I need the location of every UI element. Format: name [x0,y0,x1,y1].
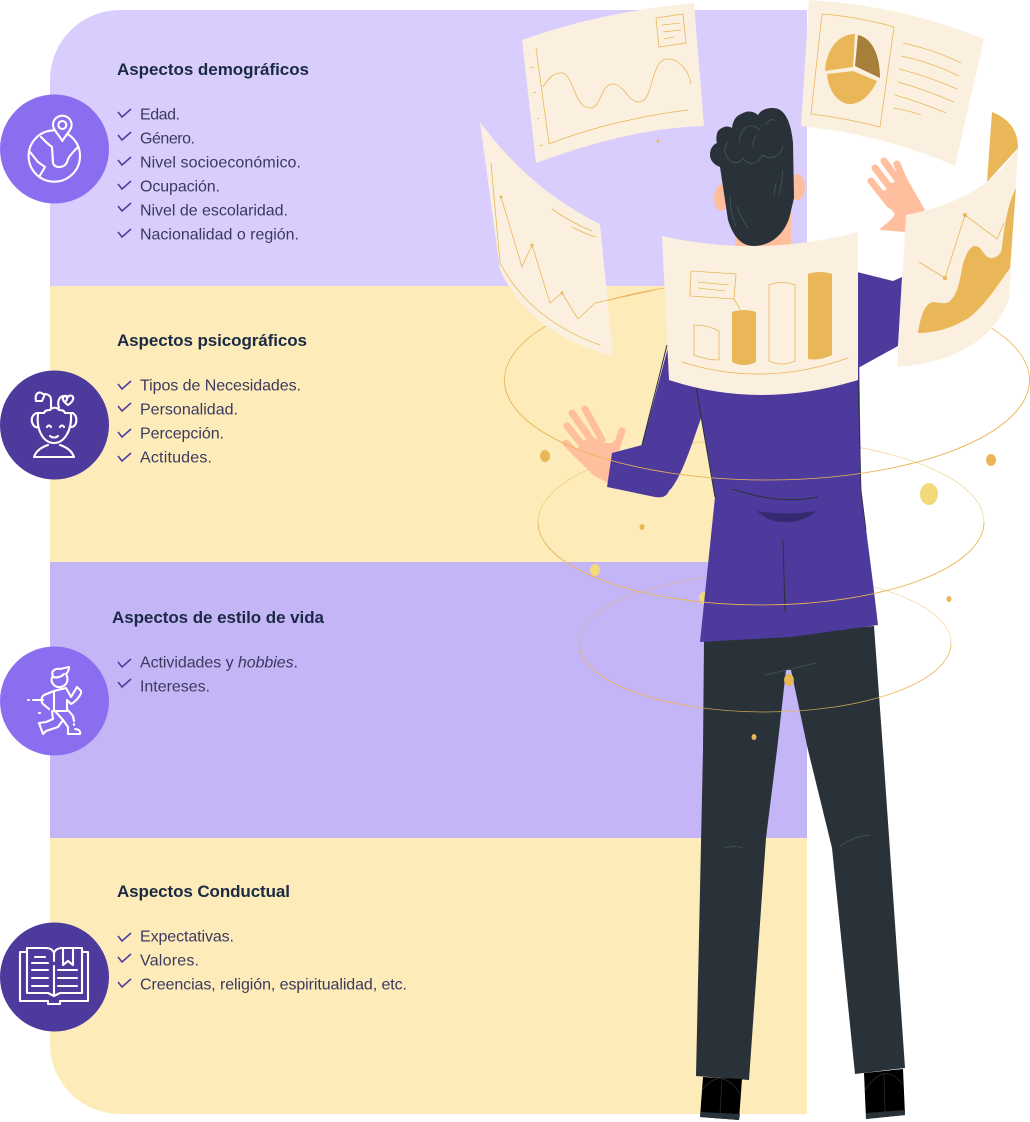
figure: right hand and raised arm [857,161,925,368]
section: aspectos psicográficos: Actitudes. [140,450,212,466]
chart card: top wave chart [522,3,704,163]
section: aspectos demográficos: Nivel socioeconómico. [140,154,301,172]
section: aspectos psicográficos [117,331,307,466]
decorative floating dots [540,140,996,740]
icon: running person [0,646,109,756]
chart card: left line chart [480,122,655,356]
orbit rings, front [504,380,1030,712]
section: aspectos demográficos: Edad. [140,106,180,124]
section: aspectos conductual: Valores. [140,952,199,970]
section: aspectos de estilo de vida: Aspectos de estilo de vida [112,608,325,627]
orbit rings, rear [504,280,1030,712]
section: aspectos de estilo de vida [112,608,325,696]
section: aspectos psicográficos: Personalidad. [140,402,238,418]
section: aspectos conductual: Expectativas. [140,928,234,946]
figure: trousers [696,626,905,1080]
figure: shoes [700,1069,905,1120]
section: aspectos demográficos: Género. [140,130,195,148]
icon: open book [0,922,109,1032]
chart card: center bar chart [662,232,858,395]
figure: jacket [607,270,878,642]
figure: hair [710,108,794,246]
icon: globe with location pin [0,94,109,204]
section: aspectos demográficos: Nivel de escolaridad. [140,202,288,220]
icon: head with hearts [0,370,109,480]
section: aspectos demográficos: Ocupación. [140,178,220,196]
chart card: pie chart [801,0,984,166]
section: aspectos de estilo de vida: Intereses. [140,678,210,696]
section: aspectos conductual [117,882,407,994]
section: aspectos psicográficos: Percepción. [140,426,224,442]
section: aspectos conductual: Aspectos Conductual [117,882,290,901]
chart card: right area chart [897,112,1018,367]
figure: neck and ears [714,174,805,250]
section: aspectos psicográficos: Tipos de Necesidades. [140,378,301,394]
section: aspectos demográficos: Aspectos demográficos [117,60,309,79]
background panel with four bands [50,10,807,1114]
section: aspectos de estilo de vida: Actividades y hobbies. [140,654,298,672]
section: aspectos demográficos [117,60,309,244]
section: aspectos psicográficos: Aspectos psicográficos [117,331,307,350]
figure: left hand [566,409,622,487]
section: aspectos demográficos: Nacionalidad o región. [140,226,299,244]
section: aspectos conductual: Creencias, religión, espiritualidad, etc. [140,976,407,994]
